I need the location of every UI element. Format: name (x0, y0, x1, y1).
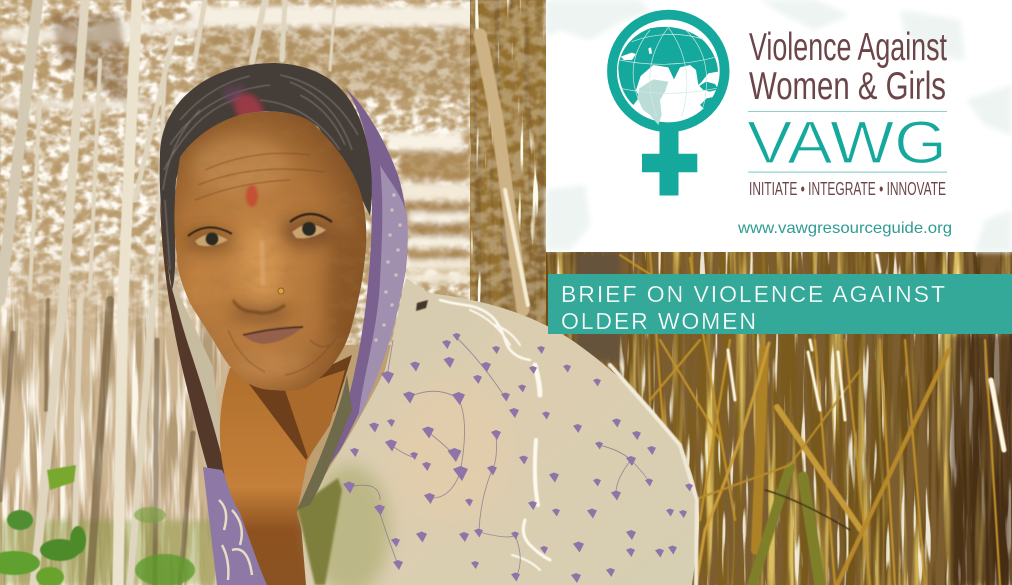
forehead wrinkles (195, 153, 338, 375)
title banner: OLDER WOMEN (561, 308, 756, 334)
icon: female symbol globe (612, 15, 725, 196)
woman: face (170, 105, 370, 395)
plants: green leaves (0, 465, 195, 585)
nose (233, 240, 285, 313)
website url: www.vawgresourceguide.org (737, 220, 952, 237)
background: bamboo fence (0, 0, 480, 585)
sunlight ripples on shawl (440, 300, 697, 585)
shawl vine lines (349, 337, 649, 577)
face shadows (183, 137, 365, 379)
woman: dark hair (160, 63, 372, 290)
globe land (618, 27, 718, 125)
logo panel (546, 0, 1012, 252)
woman: left scarf edge (160, 200, 267, 585)
mouth (243, 326, 303, 344)
woman: orange under-garment (220, 355, 352, 585)
woman: patterned shawl (297, 278, 699, 585)
woman: purple head scarf (297, 88, 408, 510)
eyes (188, 214, 332, 246)
bindi (246, 185, 258, 207)
logo wordmark: Women & Girls (749, 65, 946, 108)
background: thatched straw hut (470, 0, 1012, 585)
logo wordmark: VAWG (747, 109, 947, 176)
shawl flower motifs (343, 333, 693, 583)
straw strands (620, 252, 1000, 585)
bamboo stakes (0, 0, 335, 585)
symbol stem and cross (642, 130, 697, 196)
title banner (548, 274, 1012, 334)
nose ring (278, 288, 284, 294)
logo wordmark (747, 26, 947, 199)
title banner: BRIEF ON VIOLENCE AGAINST (561, 281, 945, 307)
faint map background (546, 0, 1012, 252)
